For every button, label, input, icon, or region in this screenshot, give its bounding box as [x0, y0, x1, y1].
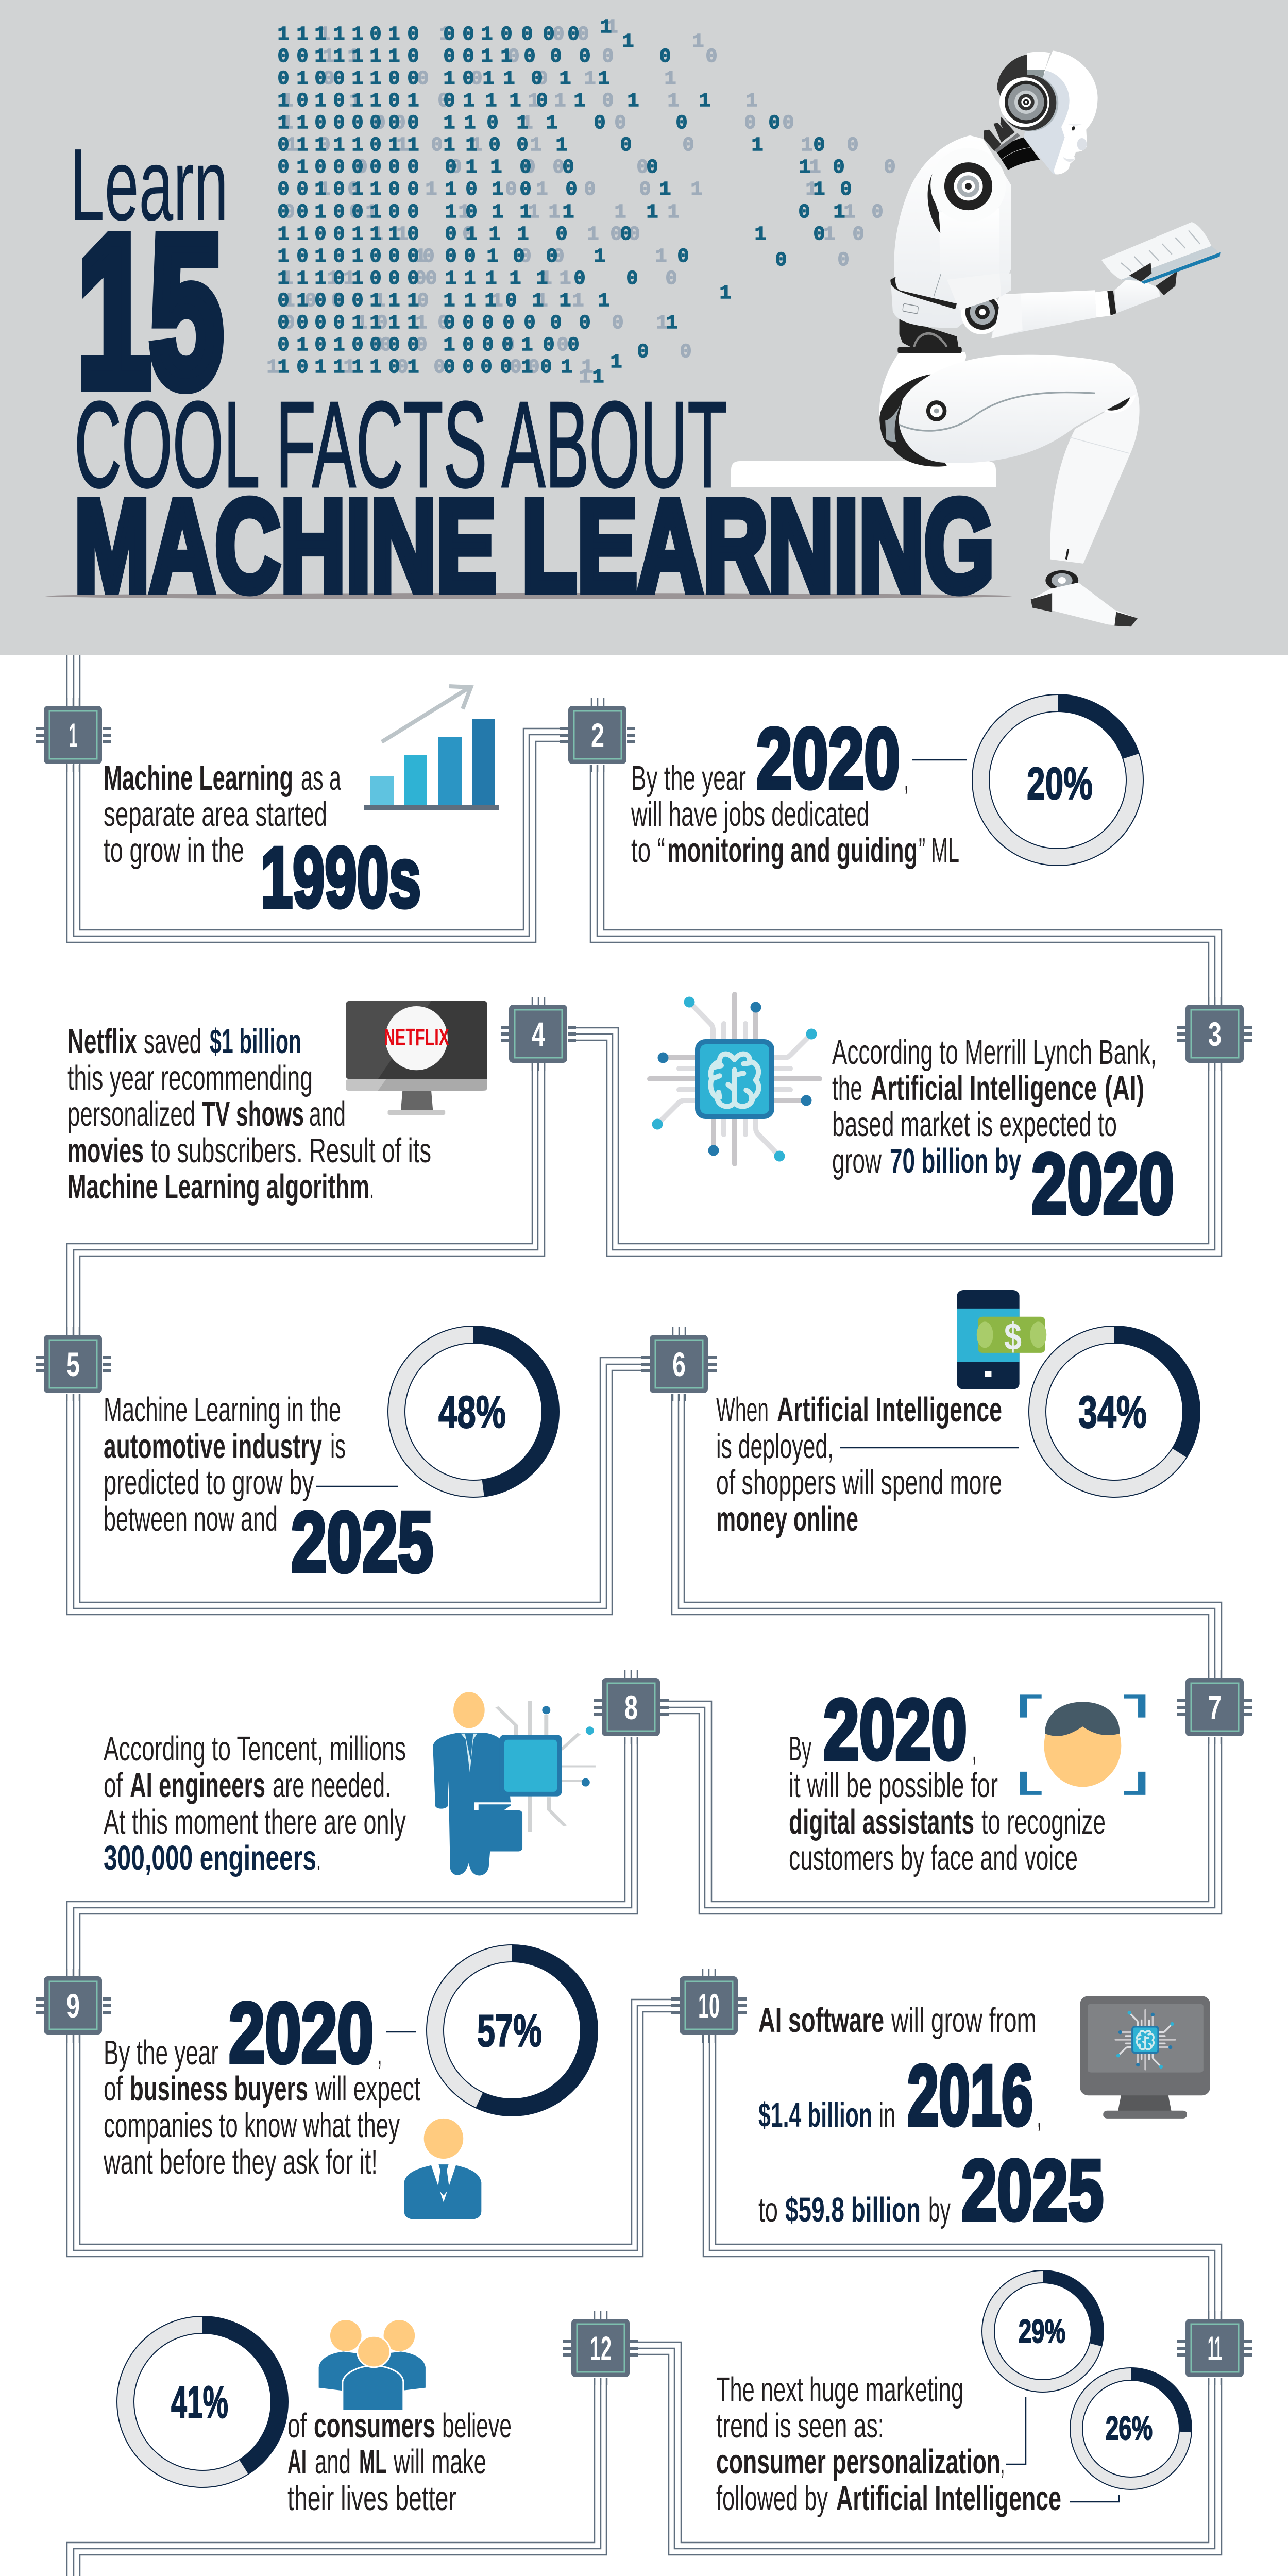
- fact 3 text: based market is expected to: [832, 1105, 1117, 1144]
- connector: [316, 1486, 398, 1487]
- binary data cloud: 1100: [319, 24, 589, 46]
- fact 10 text: will grow from: [891, 2001, 1037, 2040]
- fact 5 text: is: [330, 1427, 346, 1466]
- icon: phone with cash: $: [1004, 1315, 1022, 1358]
- fact 9 text: By the year: [104, 2033, 218, 2072]
- fact 10 text: by: [928, 2191, 951, 2229]
- fact 10 text: $59.8 billion: [785, 2191, 921, 2229]
- chip 12: [563, 2311, 638, 2385]
- fact 9 text: 2020: [229, 1986, 374, 2081]
- fact 4 text: TV shows: [202, 1095, 304, 1133]
- fact 11 text: Artificial Intelligence: [836, 2479, 1061, 2518]
- chip 6: [641, 1327, 717, 1401]
- panel: fact 1: [36, 686, 499, 925]
- panel: fact 11: [716, 2270, 1252, 2518]
- fact 5 text: 2025: [291, 1495, 433, 1590]
- fact 7 text: customers by face and voice: [789, 1839, 1078, 1877]
- fact 1 text: 1990s: [261, 830, 421, 925]
- fact 3 text: (AI): [1105, 1069, 1144, 1108]
- icon: phone with cash: [957, 1290, 1046, 1389]
- fact 12 text: will make: [393, 2443, 486, 2481]
- icon: growth bar chart: [364, 686, 499, 810]
- binary data cloud: 11011011: [282, 90, 757, 112]
- chip 4: 4: [532, 1015, 545, 1053]
- fact 7 text: ,: [972, 1730, 976, 1768]
- binary data cloud: 0010110010100110: [278, 179, 852, 201]
- binary data cloud: 1: [720, 282, 731, 304]
- fact 3 text: [832, 1033, 1174, 1232]
- title: [45, 128, 1012, 619]
- donut: 34%: [1029, 1326, 1200, 1497]
- fact 8 text: of: [104, 1766, 123, 1805]
- panel: fact 3: [650, 994, 1252, 1232]
- binary data cloud: 11010010: [372, 224, 864, 246]
- panel: fact 6: [641, 1290, 1200, 1538]
- binary data cloud: 1100111001110010: [278, 224, 825, 246]
- fact 11 text: followed by: [716, 2479, 828, 2518]
- fact 7 text: it will be possible for: [789, 1766, 998, 1805]
- fact 5 text: automotive industry: [104, 1427, 322, 1466]
- fact 9 text: will expect: [315, 2070, 420, 2108]
- chip 11: [1177, 2311, 1252, 2385]
- fact 3 text: the: [832, 1069, 862, 1108]
- fact 2 text: to “: [631, 831, 665, 870]
- fact 6 text: of shoppers will spend more: [716, 1463, 1002, 1502]
- binary data cloud: 0011111110: [283, 201, 883, 224]
- fact 10 text: 2016: [907, 2048, 1033, 2143]
- chip 9: [36, 1969, 111, 2043]
- binary data cloud: 0: [637, 341, 649, 363]
- chip 2: [560, 698, 635, 772]
- donut: 29%: [982, 2270, 1104, 2392]
- donut: 34%: 34%: [1078, 1386, 1147, 1437]
- fact 7 text: digital assistants: [789, 1803, 974, 1841]
- icon: brain chip: [650, 994, 820, 1164]
- fact 6 text: [716, 1391, 1002, 1538]
- binary data cloud: 1100000011011000: [278, 112, 780, 134]
- fact 10 text: ,: [1037, 2096, 1041, 2134]
- fact 12 text: and: [315, 2443, 351, 2481]
- panel: fact 7: [789, 1670, 1252, 1877]
- fact 2 text: ,: [904, 759, 908, 798]
- binary data cloud: 0: [838, 249, 849, 272]
- fact 9 text: of: [104, 2070, 123, 2108]
- fact 9 text: companies to know what they: [104, 2106, 400, 2145]
- fact 1 text: to grow in the: [104, 831, 244, 870]
- chip 12: 12: [590, 2329, 612, 2367]
- fact 9 text: ,: [378, 2033, 382, 2072]
- binary data cloud: 010001111110111: [278, 290, 609, 312]
- binary data cloud: 0: [775, 249, 787, 272]
- chip 6: 6: [672, 1345, 686, 1383]
- binary data cloud: 101010011: [319, 179, 817, 201]
- binary data cloud: 11000: [323, 46, 717, 68]
- fact 4 text: to subscribers. Result of its: [151, 1131, 431, 1170]
- fact 7 text: [789, 1682, 1106, 1877]
- chip 2: 2: [591, 716, 604, 754]
- fact 8 text: are needed.: [273, 1766, 391, 1805]
- connector: [840, 1447, 1019, 1448]
- chip 1: 1: [69, 716, 77, 754]
- fact 4 text: Netflix: [67, 1022, 137, 1061]
- fact 1 text: separate area started: [104, 795, 327, 834]
- chip 11: 11: [1208, 2329, 1222, 2367]
- binary data cloud: 00000010: [356, 157, 895, 179]
- fact 10 text: 2025: [961, 2143, 1104, 2238]
- icon: group of consumers: [319, 2320, 426, 2411]
- binary data cloud: 1: [592, 366, 604, 388]
- fact 1 text: as a: [301, 759, 341, 798]
- binary data cloud: 1: [600, 16, 612, 39]
- fact 8 text: AI engineers: [130, 1766, 265, 1805]
- donut: 20%: [972, 694, 1143, 866]
- donut: 57%: [427, 1945, 598, 2116]
- fact 11 text: [716, 2370, 1061, 2518]
- binary data cloud: 10010111: [283, 290, 584, 312]
- fact 10 text: to: [758, 2191, 778, 2229]
- fact 3 text: grow: [832, 1142, 882, 1180]
- fact 3 text: 70 billion by: [890, 1142, 1021, 1180]
- title: Learn: [70, 128, 228, 242]
- fact 8 text: At this moment there are only: [104, 1803, 406, 1841]
- fact 12 text: consumers: [314, 2406, 435, 2445]
- fact 12 text: believe: [442, 2406, 512, 2445]
- binary data cloud: 11100110: [282, 268, 677, 290]
- fact 5 text: between now and: [104, 1500, 278, 1538]
- binary data cloud: 1100001: [267, 357, 593, 379]
- binary data cloud: 0010010010111101: [278, 201, 845, 224]
- fact 12 text: AI: [287, 2443, 307, 2481]
- fact 6 text: When: [716, 1391, 769, 1429]
- fact 7 text: to recognize: [981, 1803, 1106, 1841]
- header panel: [0, 0, 1288, 655]
- fact 12 text: their lives better: [287, 2479, 456, 2518]
- donut: 48%: [388, 1326, 559, 1497]
- fact 4 text: Machine Learning algorithm: [67, 1167, 369, 1206]
- fact 4 text: this year recommending: [67, 1059, 313, 1097]
- fact 6 text: is deployed,: [716, 1427, 834, 1466]
- chip 7: 7: [1208, 1688, 1222, 1726]
- fact 2 text: [631, 711, 959, 870]
- fact 4 text: personalized: [67, 1095, 195, 1133]
- connectors: [1006, 2397, 1119, 2502]
- chip 5: [36, 1327, 111, 1401]
- icon: Netflix monitor: [346, 1001, 487, 1115]
- panel: fact 2: [560, 694, 1143, 870]
- panel: fact 5: [36, 1326, 559, 1590]
- binary data cloud: 101111010000101: [278, 357, 572, 379]
- fact 11 text: ,: [1001, 2443, 1005, 2481]
- fact 2 text: ” ML: [919, 831, 959, 870]
- fact 8 text: .: [316, 1839, 321, 1877]
- fact 12 text: [287, 2406, 512, 2518]
- binary data cloud: 1: [611, 351, 622, 374]
- icon: monitor with brain chip: [1080, 1996, 1210, 2119]
- chip 8: 8: [624, 1688, 638, 1726]
- fact 4 text: $1 billion: [210, 1022, 301, 1061]
- icon: business buyer: [404, 2119, 481, 2219]
- binary data cloud: 1001000: [282, 112, 794, 134]
- binary data cloud: 1: [579, 366, 590, 388]
- fact 2 text: monitoring and guiding: [667, 831, 918, 870]
- donut: 20%: 20%: [1027, 758, 1093, 809]
- fact 1 text: Machine Learning: [104, 759, 293, 798]
- binary data cloud: 0101001: [283, 312, 668, 334]
- chip 10: [671, 1969, 747, 2043]
- fact 11 text: trend is seen as:: [716, 2406, 884, 2445]
- fact 4 text: [67, 1022, 431, 1206]
- fact 5 text: Machine Learning in the: [104, 1391, 341, 1429]
- connector: [386, 2031, 416, 2032]
- binary data cloud: 010011001011011: [278, 68, 609, 90]
- fact 9 text: business buyers: [130, 2070, 308, 2108]
- binary data cloud: 0100000001100010: [278, 157, 844, 179]
- fact 12 text: of: [287, 2406, 307, 2445]
- chip 9: 9: [66, 1987, 80, 2025]
- bench: [731, 461, 996, 487]
- donut: 29%: 29%: [1019, 2313, 1065, 2350]
- fact 10 text: in: [879, 2096, 895, 2134]
- connector: [912, 759, 967, 760]
- binary data cloud: 101010000010010: [278, 246, 689, 268]
- panel: fact 10: [671, 1969, 1210, 2238]
- fact 4 text: .: [369, 1167, 374, 1206]
- fact 3 text: Artificial Intelligence: [871, 1069, 1097, 1108]
- binary data cloud: 0011111000110000: [278, 46, 671, 68]
- fact 2 text: 2020: [756, 711, 900, 806]
- chip 1: [36, 698, 111, 772]
- fact 9 text: want before they ask for it!: [103, 2143, 378, 2181]
- chip 7: [1177, 1670, 1252, 1744]
- binary data cloud: 0000111100000001: [278, 312, 677, 334]
- binary data cloud: 101011010: [286, 134, 858, 157]
- fact 5 text: predicted to grow by: [104, 1463, 314, 1502]
- fact 9 text: [103, 1986, 420, 2181]
- binary data cloud: 0: [680, 341, 691, 363]
- binary data cloud: 1010110101110111: [278, 90, 710, 112]
- donut: 48%: 48%: [438, 1386, 506, 1437]
- binary data cloud: [267, 16, 895, 388]
- chip 4: [501, 997, 576, 1071]
- binary data cloud: 1: [622, 31, 634, 53]
- fact 6 text: money online: [716, 1500, 858, 1538]
- panel: fact 9: [36, 1945, 598, 2219]
- fact 12 text: ML: [359, 2443, 387, 2481]
- panel: fact 12: [117, 2311, 638, 2518]
- binary data cloud: 00000: [372, 334, 568, 357]
- fact 2 text: will have jobs dedicated: [631, 795, 869, 834]
- binary data cloud: 010100001000100: [278, 334, 579, 357]
- fact 7 text: 2020: [823, 1682, 967, 1777]
- panel: fact 8: [104, 1670, 669, 1877]
- binary data cloud: 0111101111001010: [278, 134, 825, 157]
- donut: 41%: [117, 2316, 288, 2487]
- title: COOL FACTS ABOUT: [74, 377, 727, 513]
- binary data cloud: 1: [692, 31, 704, 53]
- fact 6 text: Artificial Intelligence: [777, 1391, 1002, 1429]
- panel: fact 4: [67, 997, 576, 1206]
- fact 3 text: 2020: [1031, 1137, 1174, 1232]
- circuit connector lines: [67, 655, 1222, 2576]
- fact 8 text: [104, 1730, 406, 1877]
- chip 8: [594, 1670, 669, 1744]
- fact 10 text: [758, 2001, 1104, 2238]
- donut: 57%: 57%: [477, 2005, 542, 2056]
- icon: reading robot: [879, 50, 1221, 626]
- chip 10: 10: [698, 1987, 720, 2025]
- icon: engineer with chip: [433, 1692, 596, 1876]
- fact 11 text: consumer personalization: [716, 2443, 1001, 2481]
- fact 10 text: $1.4 billion: [758, 2096, 872, 2134]
- fact 8 text: According to Tencent, millions: [104, 1730, 406, 1768]
- title: 15: [78, 193, 223, 429]
- chip 5: 5: [66, 1345, 80, 1383]
- fact 4 text: saved: [144, 1022, 201, 1061]
- fact 7 text: By: [789, 1730, 811, 1768]
- binary data cloud: 10001: [415, 246, 667, 268]
- donut: 26%: [1070, 2368, 1192, 2489]
- fact 1 text: [104, 759, 421, 925]
- binary data cloud: 1: [606, 16, 618, 39]
- icon: face recognition: [1024, 1697, 1142, 1793]
- chip 3: 3: [1208, 1015, 1222, 1053]
- fact 4 text: movies: [67, 1131, 144, 1170]
- fact 8 text: 300,000 engineers: [104, 1839, 316, 1877]
- donut: 41%: 41%: [171, 2377, 228, 2428]
- binary data cloud: 000011: [323, 68, 676, 90]
- binary data cloud: 111010001111100: [278, 268, 638, 290]
- fact 10 text: AI software: [758, 2001, 884, 2040]
- binary data cloud: 111110100010000: [278, 24, 579, 46]
- donut: 26%: 26%: [1106, 2410, 1153, 2447]
- chip 3: [1177, 997, 1252, 1071]
- fact 5 text: [104, 1391, 433, 1590]
- fact 11 text: The next huge marketing: [716, 2370, 963, 2409]
- fact 4 text: and: [309, 1095, 346, 1133]
- icon: Netflix monitor: NETFLIX: [384, 1024, 449, 1050]
- fact 2 text: By the year: [631, 759, 746, 798]
